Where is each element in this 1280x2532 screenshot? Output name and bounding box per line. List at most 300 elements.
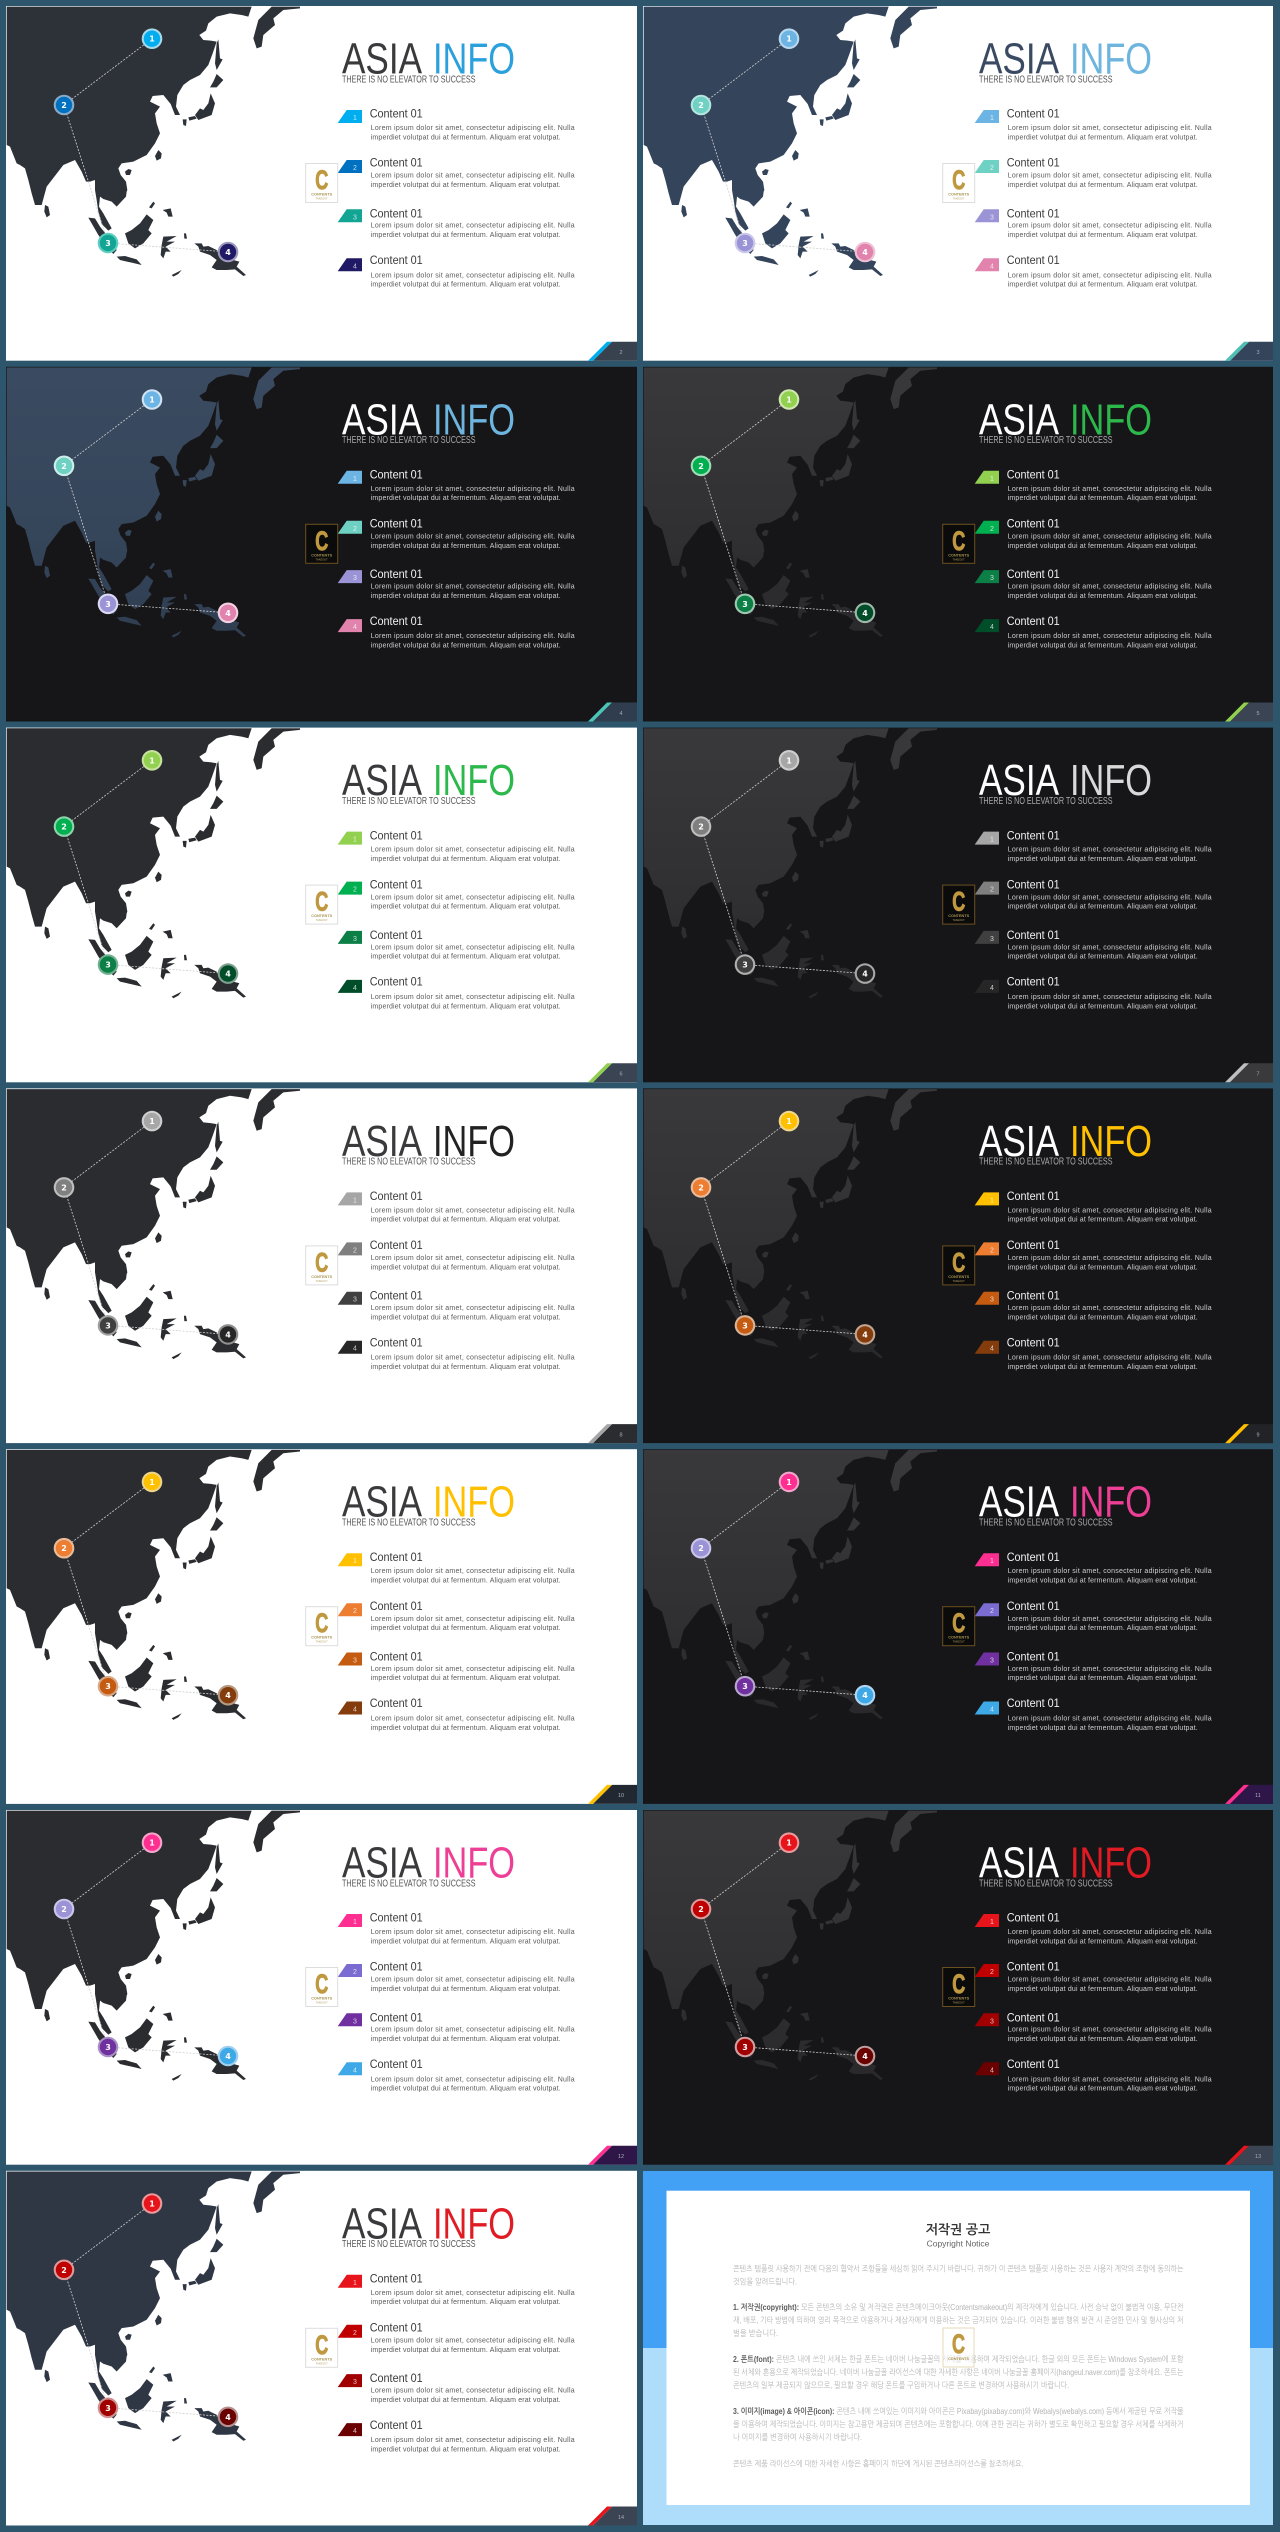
item 2: Lorem ipsum dolor sit amet, consectetur adipiscing elit. Nulla (371, 1977, 575, 1984)
markers: 2 (61, 1544, 67, 1553)
logo: TAKEOUT (316, 2361, 328, 2365)
item 3: Lorem ipsum dolor sit amet, consectetur adipiscing elit. Nulla (1008, 2027, 1212, 2034)
logo (306, 885, 338, 924)
item 4: 4 (353, 624, 357, 631)
item 4: 4 (990, 624, 994, 631)
item 4 (338, 2418, 575, 2454)
item 1: Lorem ipsum dolor sit amet, consectetur adipiscing elit. Nulla (371, 2290, 575, 2297)
title: ASIA (342, 1838, 423, 1888)
slide 14: white red (6, 2171, 637, 2526)
markers: 2 (61, 101, 67, 110)
markers: 1 (149, 1839, 155, 1848)
logo: CONTENTS (311, 553, 333, 557)
item 1: imperdiet volutpat dui at fermentum. Aliquam erat volutpat. (371, 2299, 561, 2306)
item 1: Lorem ipsum dolor sit amet, consectetur adipiscing elit. Nulla (1008, 1207, 1212, 1214)
item 2 (975, 516, 1212, 550)
title: ASIA (979, 395, 1060, 444)
title: INFO (1070, 756, 1152, 805)
slide 12: white pink (6, 1810, 637, 2165)
title: INFO (433, 1478, 515, 1527)
item 4: Content 01 (370, 1696, 423, 1710)
subtitle: THERE IS NO ELEVATOR TO SUCCESS (979, 1517, 1113, 1528)
item 4: imperdiet volutpat dui at fermentum. Aliquam erat volutpat. (1008, 1364, 1198, 1371)
logo: C (952, 887, 965, 917)
subtitle: THERE IS NO ELEVATOR TO SUCCESS (342, 1878, 476, 1889)
item 2: 2 (353, 1608, 357, 1615)
item 3: Lorem ipsum dolor sit amet, consectetur adipiscing elit. Nulla (371, 583, 575, 590)
markers: 4 (225, 970, 231, 979)
title: ASIA (342, 756, 423, 805)
footer page number (1225, 1063, 1273, 1082)
item 2: 2 (353, 1247, 357, 1254)
footer page number: 4 (619, 711, 623, 717)
logo (943, 1246, 975, 1285)
logo: C (315, 1247, 328, 1277)
panel (6, 1449, 637, 1804)
closing line: 콘텐츠 제품 라이선스에 대한 자세한 사항은 홈페이지 하단에 게시된 콘텐츠라이선스를 참조하세요. (733, 2458, 1024, 2468)
footer page number: 11 (1255, 1793, 1261, 1799)
item 3: Lorem ipsum dolor sit amet, consectetur adipiscing elit. Nulla (1008, 1666, 1212, 1673)
logo: CONTENTS (948, 553, 970, 557)
logo: TAKEOUT (316, 2000, 328, 2004)
title: INFO (1070, 1838, 1152, 1888)
title: INFO (1070, 1478, 1152, 1527)
subtitle: THERE IS NO ELEVATOR TO SUCCESS (979, 1878, 1113, 1889)
item 4: Lorem ipsum dolor sit amet, consectetur adipiscing elit. Nulla (371, 994, 575, 1001)
item 4: imperdiet volutpat dui at fermentum. Aliquam erat volutpat. (371, 1003, 561, 1010)
panel (6, 1810, 637, 2165)
route (701, 1121, 865, 1334)
footer page number: 8 (619, 1432, 623, 1438)
item 3: Content 01 (1007, 567, 1060, 581)
item 1: Lorem ipsum dolor sit amet, consectetur adipiscing elit. Nulla (371, 847, 575, 854)
item 3: 3 (353, 214, 357, 221)
item 1: imperdiet volutpat dui at fermentum. Aliquam erat volutpat. (371, 1217, 561, 1224)
item 4: Content 01 (1007, 2057, 1060, 2071)
footer page number: 12 (618, 2154, 624, 2160)
item 3: 3 (353, 1657, 357, 1664)
item 1 (975, 468, 1212, 502)
subtitle: THERE IS NO ELEVATOR TO SUCCESS (979, 435, 1113, 446)
item 3: 3 (990, 2018, 994, 2025)
item 3: imperdiet volutpat dui at fermentum. Aliquam erat volutpat. (1008, 2036, 1198, 2043)
markers: 1 (786, 35, 792, 44)
logo: C (315, 1608, 328, 1638)
logo: C (315, 887, 328, 917)
logo: CONTENTS (311, 914, 333, 918)
markers: 4 (225, 609, 231, 618)
item 2: 2 (990, 887, 994, 894)
item 1: 1 (990, 1558, 994, 1565)
item 1: Content 01 (370, 107, 423, 121)
logo: CONTENTS (948, 1275, 970, 1279)
item 1: imperdiet volutpat dui at fermentum. Aliquam erat volutpat. (1008, 1938, 1198, 1945)
item 1: imperdiet volutpat dui at fermentum. Aliquam erat volutpat. (371, 1577, 561, 1584)
item 3: Lorem ipsum dolor sit amet, consectetur adipiscing elit. Nulla (371, 1305, 575, 1312)
item 1 (338, 107, 575, 141)
footer page number (588, 2146, 637, 2165)
item 1: Lorem ipsum dolor sit amet, consectetur adipiscing elit. Nulla (1008, 847, 1212, 854)
markers: 3 (742, 1321, 748, 1330)
map (644, 728, 937, 998)
markers: 4 (225, 248, 231, 257)
item 2 (338, 877, 575, 911)
markers: 2 (61, 1905, 67, 1914)
markers (691, 389, 875, 623)
item 1: 1 (990, 1919, 994, 1926)
item 2: 2 (990, 165, 994, 172)
markers: 2 (698, 462, 704, 471)
logo: C (315, 1969, 328, 1999)
map (7, 1450, 300, 1720)
item 3 (338, 206, 575, 239)
item 3 (338, 928, 575, 961)
section 3: image and icon (733, 2406, 1184, 2442)
subtitle: THERE IS NO ELEVATOR TO SUCCESS (342, 1157, 476, 1168)
item 2: Content 01 (370, 877, 423, 891)
item 1: 1 (353, 2280, 357, 2287)
item 3: 3 (353, 1297, 357, 1304)
logo: CONTENTS (311, 1636, 333, 1640)
footer page number (1225, 1424, 1273, 1443)
item 4: 4 (353, 1346, 357, 1353)
item 3: Lorem ipsum dolor sit amet, consectetur adipiscing elit. Nulla (371, 2027, 575, 2034)
item 2: Lorem ipsum dolor sit amet, consectetur adipiscing elit. Nulla (1008, 1255, 1212, 1262)
markers: 3 (742, 2043, 748, 2052)
item 1: Content 01 (370, 467, 423, 481)
logo: C (315, 526, 328, 556)
item 4: 4 (353, 2067, 357, 2074)
markers (54, 2193, 238, 2427)
item 2: Content 01 (370, 1960, 423, 1974)
slide 3: white pastel (643, 6, 1273, 361)
item 3: 3 (353, 2379, 357, 2386)
item 4: 4 (353, 985, 357, 992)
map (644, 7, 937, 277)
markers (54, 750, 238, 984)
item 2: Lorem ipsum dolor sit amet, consectetur adipiscing elit. Nulla (371, 173, 575, 180)
item 3: 3 (353, 575, 357, 582)
item 3: Lorem ipsum dolor sit amet, consectetur adipiscing elit. Nulla (1008, 223, 1212, 230)
item 2: Lorem ipsum dolor sit amet, consectetur adipiscing elit. Nulla (371, 894, 575, 901)
markers (691, 750, 875, 984)
panel (643, 728, 1273, 1082)
item 2: Content 01 (1007, 156, 1060, 170)
item 3: imperdiet volutpat dui at fermentum. Aliquam erat volutpat. (1008, 232, 1198, 239)
item 4 (975, 1335, 1212, 1371)
markers: 3 (742, 239, 748, 248)
item 1: 1 (353, 1558, 357, 1565)
item 1: Content 01 (1007, 1911, 1060, 1925)
logo: TAKEOUT (953, 2000, 965, 2004)
markers: 4 (862, 1691, 868, 1700)
item 3: imperdiet volutpat dui at fermentum. Aliquam erat volutpat. (371, 954, 561, 961)
logo: TAKEOUT (953, 557, 965, 561)
item 3: 3 (990, 1657, 994, 1664)
logo: CONTENTS (311, 1996, 333, 2000)
title: ASIA (342, 2199, 423, 2248)
markers: 2 (698, 1544, 704, 1553)
footer page number (588, 702, 637, 722)
item 4: 4 (353, 2428, 357, 2435)
markers: 1 (786, 395, 792, 404)
markers (54, 1111, 238, 1345)
item 4: 4 (353, 263, 357, 270)
markers: 2 (61, 823, 67, 832)
title: ASIA (979, 1478, 1060, 1527)
panel (6, 6, 637, 361)
footer page number (1225, 1785, 1273, 1804)
markers: 2 (698, 1905, 704, 1914)
map (7, 1089, 300, 1359)
copyright notice slide (643, 2171, 1273, 2525)
item 3 (338, 2010, 575, 2043)
footer page number: 7 (1256, 1072, 1260, 1078)
item 1 (338, 468, 575, 502)
item 4: Content 01 (1007, 614, 1060, 628)
item 1: Content 01 (370, 1911, 423, 1925)
title: INFO (433, 756, 515, 805)
slide 8: white gray (6, 1088, 637, 1443)
item 2 (975, 1599, 1212, 1632)
section 3: image and icon: 나 이미지를 변경하여 사용하시기 바랍니다. (733, 2432, 862, 2442)
item 2 (338, 156, 575, 189)
item 2: 2 (353, 2330, 357, 2337)
logo: C (952, 526, 965, 556)
item 1: Content 01 (1007, 1189, 1060, 1203)
panel (6, 367, 637, 722)
markers (691, 28, 875, 262)
item 3: imperdiet volutpat dui at fermentum. Aliquam erat volutpat. (1008, 1314, 1198, 1321)
route (701, 39, 865, 252)
item 3: imperdiet volutpat dui at fermentum. Aliquam erat volutpat. (371, 593, 561, 600)
item 3: Content 01 (370, 2371, 423, 2385)
item 1: Lorem ipsum dolor sit amet, consectetur adipiscing elit. Nulla (371, 1568, 575, 1575)
item 1: 1 (990, 476, 994, 483)
footer page number: 13 (1255, 2154, 1261, 2160)
logo: CONTENTS (948, 1636, 970, 1640)
logo: C (952, 165, 965, 195)
slide 2: white blue (6, 6, 637, 361)
item 1 (975, 1189, 1212, 1224)
item 4 (975, 975, 1212, 1010)
item 3: Content 01 (370, 1289, 423, 1303)
item 4 (338, 1696, 575, 1732)
item 4 (338, 2057, 575, 2093)
subtitle: THERE IS NO ELEVATOR TO SUCCESS (342, 796, 476, 807)
item 1: 1 (990, 837, 994, 844)
panel (643, 1449, 1273, 1804)
item 2: Lorem ipsum dolor sit amet, consectetur adipiscing elit. Nulla (371, 2338, 575, 2345)
item 4: imperdiet volutpat dui at fermentum. Aliquam erat volutpat. (1008, 282, 1198, 289)
item 1: imperdiet volutpat dui at fermentum. Aliquam erat volutpat. (1008, 856, 1198, 863)
item 4: Content 01 (1007, 1696, 1060, 1710)
item 4: Content 01 (370, 253, 423, 267)
item 1 (338, 828, 575, 863)
section 1: copyright: 재, 배포, 기타 방법에 의하여 영리 목적으로 이용하거나 제삼자에게 이용하는 것은 금지되어 있습니다. 이러한 불법 행위 발견 시 준엄한 민사 및 형사상의 처 (733, 2315, 1184, 2325)
item 4: Content 01 (370, 2057, 423, 2071)
item 4 (975, 2057, 1212, 2093)
blue top background (643, 2171, 1273, 2348)
logo: TAKEOUT (953, 1279, 965, 1283)
section 2: font: 된 서체와 혼용으로 제작되었습니다. 네이버 나눔글꼴 라이선스에 대한 자세한 사항은 네이버 나눔글꼴 홈페이지(hangeul.naver.com)를 참조하세요. 폰트는 (733, 2367, 1184, 2377)
notice title: 저작권 공고 (926, 2222, 990, 2237)
item 4: 4 (990, 1706, 994, 1713)
item 2: Content 01 (1007, 516, 1060, 530)
title: INFO (1070, 395, 1152, 444)
item 4: Content 01 (1007, 1335, 1060, 1349)
map (7, 728, 300, 998)
item 2: imperdiet volutpat dui at fermentum. Aliquam erat volutpat. (1008, 1625, 1198, 1632)
item 2: 2 (990, 526, 994, 533)
footer page number: 2 (619, 350, 623, 356)
panel (643, 1810, 1273, 2165)
item 3: Lorem ipsum dolor sit amet, consectetur adipiscing elit. Nulla (1008, 1305, 1212, 1312)
markers: 1 (786, 1117, 792, 1126)
logo (943, 164, 975, 202)
item 1 (975, 1911, 1212, 1945)
logo: CONTENTS (311, 1275, 333, 1279)
logo: CONTENTS (948, 914, 970, 918)
item 1: 1 (990, 1197, 994, 1204)
item 4 (338, 614, 575, 650)
item 1 (338, 1189, 575, 1224)
item 4: Lorem ipsum dolor sit amet, consectetur adipiscing elit. Nulla (1008, 2076, 1212, 2083)
item 4: imperdiet volutpat dui at fermentum. Aliquam erat volutpat. (371, 1725, 561, 1732)
item 2: 2 (353, 887, 357, 894)
map (7, 367, 300, 637)
logo: C (315, 2330, 328, 2360)
item 4: Lorem ipsum dolor sit amet, consectetur adipiscing elit. Nulla (371, 1715, 575, 1722)
item 4: 4 (990, 985, 994, 992)
item 2: imperdiet volutpat dui at fermentum. Aliquam erat volutpat. (371, 1625, 561, 1632)
logo (943, 1607, 975, 1646)
item 1: Content 01 (370, 1189, 423, 1203)
subtitle: THERE IS NO ELEVATOR TO SUCCESS (342, 1517, 476, 1528)
item 1: imperdiet volutpat dui at fermentum. Aliquam erat volutpat. (371, 856, 561, 863)
logo: TAKEOUT (316, 1279, 328, 1283)
item 3: Content 01 (370, 928, 423, 942)
item 3: imperdiet volutpat dui at fermentum. Aliquam erat volutpat. (371, 1675, 561, 1682)
item 3: imperdiet volutpat dui at fermentum. Aliquam erat volutpat. (1008, 1675, 1198, 1682)
item 3: Content 01 (370, 206, 423, 220)
item 2: imperdiet volutpat dui at fermentum. Aliquam erat volutpat. (1008, 182, 1198, 189)
item 2 (975, 1960, 1212, 1993)
markers: 4 (862, 970, 868, 979)
item 3: imperdiet volutpat dui at fermentum. Aliquam erat volutpat. (1008, 593, 1198, 600)
footer page number: 10 (618, 1793, 624, 1799)
logo: CONTENTS (311, 192, 333, 196)
item 1: Content 01 (370, 2272, 423, 2286)
item 2: imperdiet volutpat dui at fermentum. Aliquam erat volutpat. (371, 2347, 561, 2354)
item 3: imperdiet volutpat dui at fermentum. Aliquam erat volutpat. (371, 1314, 561, 1321)
item 2 (338, 1599, 575, 1632)
item 4: Lorem ipsum dolor sit amet, consectetur adipiscing elit. Nulla (1008, 633, 1212, 640)
title: INFO (1070, 34, 1152, 84)
title: ASIA (979, 1838, 1060, 1888)
slide 9: dark orange (643, 1088, 1273, 1443)
route (701, 1482, 865, 1695)
logo (306, 1246, 338, 1285)
item 1: Lorem ipsum dolor sit amet, consectetur adipiscing elit. Nulla (371, 125, 575, 132)
item 2: Content 01 (1007, 1960, 1060, 1974)
item 3: 3 (990, 936, 994, 943)
footer page number: 6 (619, 1072, 623, 1078)
logo: TAKEOUT (316, 918, 328, 922)
panel (6, 728, 637, 1082)
title: ASIA (342, 34, 423, 84)
item 4: 4 (990, 1346, 994, 1353)
item 2: imperdiet volutpat dui at fermentum. Aliquam erat volutpat. (371, 543, 561, 550)
map (7, 1811, 300, 2081)
item 1: 1 (990, 115, 994, 122)
section 1: copyright: 1. 저작권(copyright): 모든 콘텐츠의 소유 및 저작권은 콘텐츠메이크아웃(Contentsmakeout)의 제작자에게 있습니다. 사전 승낙 없이 불법적 이용, 무단전 (733, 2302, 1184, 2312)
item 1: Content 01 (1007, 828, 1060, 842)
item 2: imperdiet volutpat dui at fermentum. Aliquam erat volutpat. (371, 904, 561, 911)
item 4: Content 01 (370, 975, 423, 989)
item 4: Content 01 (1007, 253, 1060, 267)
item 4: Content 01 (370, 2418, 423, 2432)
logo: TAKEOUT (316, 196, 328, 200)
item 4: Lorem ipsum dolor sit amet, consectetur adipiscing elit. Nulla (371, 1355, 575, 1362)
footer page number: 3 (1256, 350, 1260, 356)
item 4 (338, 1335, 575, 1371)
item 4: Lorem ipsum dolor sit amet, consectetur adipiscing elit. Nulla (371, 2076, 575, 2083)
subtitle: THERE IS NO ELEVATOR TO SUCCESS (342, 435, 476, 446)
logo: C (952, 2329, 965, 2359)
route (64, 760, 228, 974)
item 4: Lorem ipsum dolor sit amet, consectetur adipiscing elit. Nulla (371, 633, 575, 640)
title: INFO (433, 1838, 515, 1888)
item 4 (975, 1696, 1212, 1732)
markers: 3 (105, 2404, 111, 2413)
slide 13: dark red (643, 1810, 1273, 2165)
subtitle: THERE IS NO ELEVATOR TO SUCCESS (342, 74, 476, 85)
item 2: imperdiet volutpat dui at fermentum. Aliquam erat volutpat. (371, 1986, 561, 1993)
light blue bottom background (643, 2348, 1273, 2525)
markers: 4 (862, 1330, 868, 1339)
item 4: 4 (990, 2067, 994, 2074)
markers: 2 (61, 2266, 67, 2275)
markers: 1 (149, 35, 155, 44)
item 4: Lorem ipsum dolor sit amet, consectetur adipiscing elit. Nulla (1008, 1355, 1212, 1362)
item 2 (975, 877, 1212, 911)
footer page number (588, 1424, 637, 1443)
item 3: imperdiet volutpat dui at fermentum. Aliquam erat volutpat. (1008, 954, 1198, 961)
item 4: Lorem ipsum dolor sit amet, consectetur adipiscing elit. Nulla (371, 2437, 575, 2444)
section 1: copyright (733, 2302, 1184, 2338)
item 2: Lorem ipsum dolor sit amet, consectetur adipiscing elit. Nulla (371, 533, 575, 540)
footer page number: 5 (1256, 711, 1260, 717)
item 4: Content 01 (1007, 975, 1060, 989)
map (7, 2171, 300, 2441)
item 2 (338, 1960, 575, 1993)
item 2: Content 01 (370, 1599, 423, 1613)
item 3 (975, 928, 1212, 961)
markers: 4 (225, 2052, 231, 2061)
item 1 (338, 2272, 575, 2306)
logo: C (952, 1969, 965, 1999)
item 3: Lorem ipsum dolor sit amet, consectetur adipiscing elit. Nulla (371, 223, 575, 230)
route (64, 1843, 228, 2056)
item 3 (975, 1650, 1212, 1682)
item 2 (975, 156, 1212, 189)
markers: 3 (105, 2043, 111, 2052)
subtitle: THERE IS NO ELEVATOR TO SUCCESS (979, 1157, 1113, 1168)
title: ASIA (342, 1478, 423, 1527)
item 4: Content 01 (370, 1335, 423, 1349)
markers: 4 (862, 248, 868, 257)
